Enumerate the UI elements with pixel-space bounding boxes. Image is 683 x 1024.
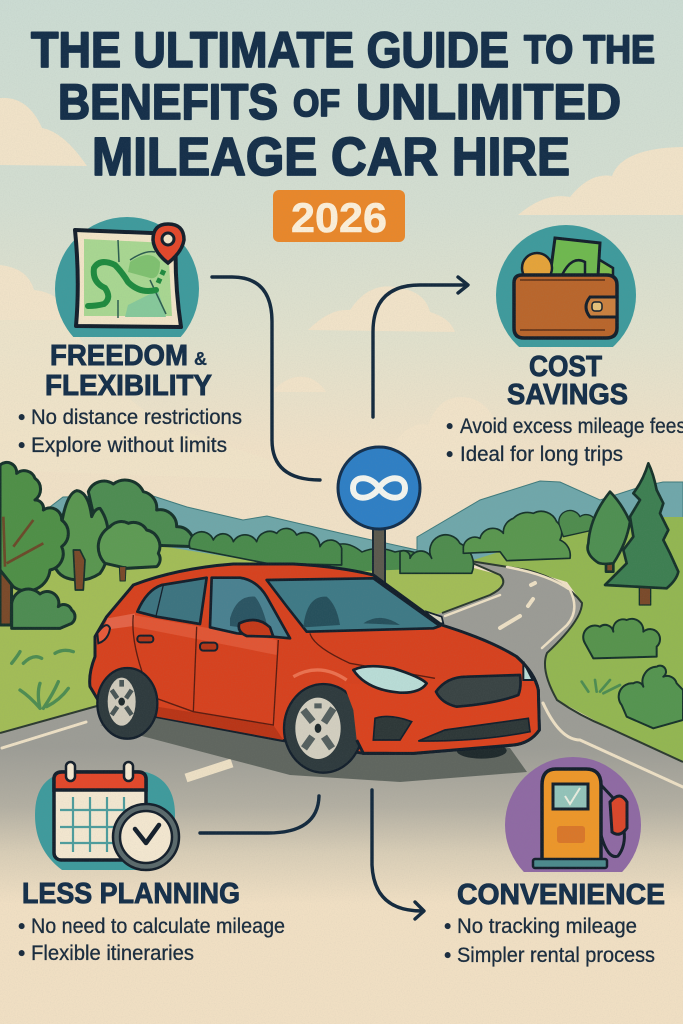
road	[0, 561, 683, 1024]
trees left	[0, 462, 342, 708]
title: BENEFITS	[58, 74, 278, 130]
title: UNLIMITED	[356, 74, 621, 130]
sign: infinity	[338, 447, 420, 529]
clouds	[0, 98, 683, 480]
car	[90, 564, 539, 773]
title: MILEAGE CAR HIRE	[92, 127, 570, 187]
tree: second left	[55, 491, 109, 580]
heading and list: less planning: •	[18, 942, 25, 965]
heading and list: freedom and flexibility: FLEXIBILITY	[45, 370, 212, 402]
icon: map with pin	[55, 217, 199, 337]
car body	[90, 564, 539, 753]
heading and list: freedom and flexibility: FREEDOM	[50, 340, 188, 372]
heading and list: convenience: CONVENIENCE	[457, 879, 665, 911]
heading and list: cost savings: COST	[529, 351, 602, 383]
tree: third left	[98, 522, 160, 568]
road edges	[0, 561, 683, 762]
heading and list: cost savings: Ideal for long trips	[460, 443, 623, 466]
car panel lines	[133, 615, 435, 725]
icon: wallet with money	[496, 225, 636, 347]
heading and list: freedom and flexibility: &	[194, 349, 207, 369]
tree trunk: big	[0, 517, 12, 625]
heading and list: less planning: Flexible itineraries	[31, 942, 194, 965]
title: THE ULTIMATE GUIDE	[31, 22, 509, 78]
heading and list: freedom and flexibility: No distance restrictions	[31, 406, 242, 429]
car shadow	[100, 700, 527, 782]
bumper outline	[357, 657, 539, 753]
heading and list: convenience: Simpler rental process	[457, 944, 655, 967]
heading and list: freedom and flexibility: •	[18, 406, 25, 429]
icon: calendar with clock	[35, 762, 179, 870]
bush right lower	[619, 666, 683, 728]
front bumper	[343, 678, 538, 753]
trees right	[400, 463, 683, 728]
arrow: sign to cost savings	[373, 277, 468, 417]
tree: big left	[0, 462, 68, 591]
rear wheel	[97, 668, 157, 739]
heading and list: less planning	[18, 878, 285, 965]
heading and list: freedom and flexibility: Explore without limits	[31, 434, 227, 457]
heading and list: convenience: No tracking mileage	[457, 915, 637, 938]
title: TO THE	[524, 28, 655, 72]
year badge	[273, 190, 405, 242]
lower intake	[418, 718, 530, 741]
far front wheel	[457, 743, 507, 759]
grass tufts	[12, 650, 73, 708]
far mirror	[427, 612, 443, 623]
arrow: car to less planning	[200, 796, 319, 833]
year badge: 2026	[291, 194, 387, 241]
arrow: car to convenience	[372, 790, 424, 919]
treeline strip	[189, 528, 342, 565]
heading and list: cost savings: •	[446, 415, 453, 438]
front wheel	[284, 684, 363, 773]
headlight	[353, 666, 427, 693]
bush right upper	[583, 619, 660, 658]
sign post	[373, 526, 385, 584]
icon: fuel pump	[505, 757, 641, 872]
heading and list: cost savings: SAVINGS	[507, 379, 628, 411]
heading and list: less planning: No need to calculate mileage	[31, 915, 285, 938]
road markings	[2, 567, 683, 787]
car belt highlight	[133, 615, 277, 655]
back tree cluster	[88, 480, 194, 547]
treeline behind sign	[330, 544, 420, 575]
title	[31, 22, 655, 187]
mountains	[46, 481, 683, 600]
rocker shadow	[157, 707, 283, 740]
heading and list: convenience: •	[444, 915, 451, 938]
car mirror	[239, 620, 273, 637]
grille	[436, 675, 521, 707]
grass fields	[0, 517, 683, 762]
heading and list: convenience	[444, 879, 665, 967]
heading and list: less planning: •	[18, 915, 25, 938]
fog lamp intake	[373, 716, 412, 740]
small side lamp	[523, 662, 533, 680]
wheel arch highlight	[293, 670, 347, 680]
car windshield	[267, 578, 440, 632]
arrow: freedom to sign	[212, 277, 320, 480]
bush left	[12, 589, 75, 628]
title: OF	[293, 83, 340, 125]
car front side window	[210, 578, 290, 638]
heading and list: cost savings: •	[446, 443, 453, 466]
grass tuft	[582, 680, 620, 693]
tree: second left trunk	[73, 550, 85, 590]
heading and list: freedom and flexibility	[18, 340, 242, 457]
heading and list: convenience: •	[444, 944, 451, 967]
heading and list: freedom and flexibility: •	[18, 434, 25, 457]
pine: small	[606, 557, 613, 572]
tail light	[97, 625, 110, 643]
car rear windows	[137, 578, 207, 624]
bushes behind road	[400, 535, 473, 573]
pine: large	[639, 583, 651, 605]
heading and list: cost savings	[446, 351, 683, 466]
heading and list: less planning: LESS PLANNING	[22, 878, 240, 910]
door handles	[137, 636, 153, 642]
